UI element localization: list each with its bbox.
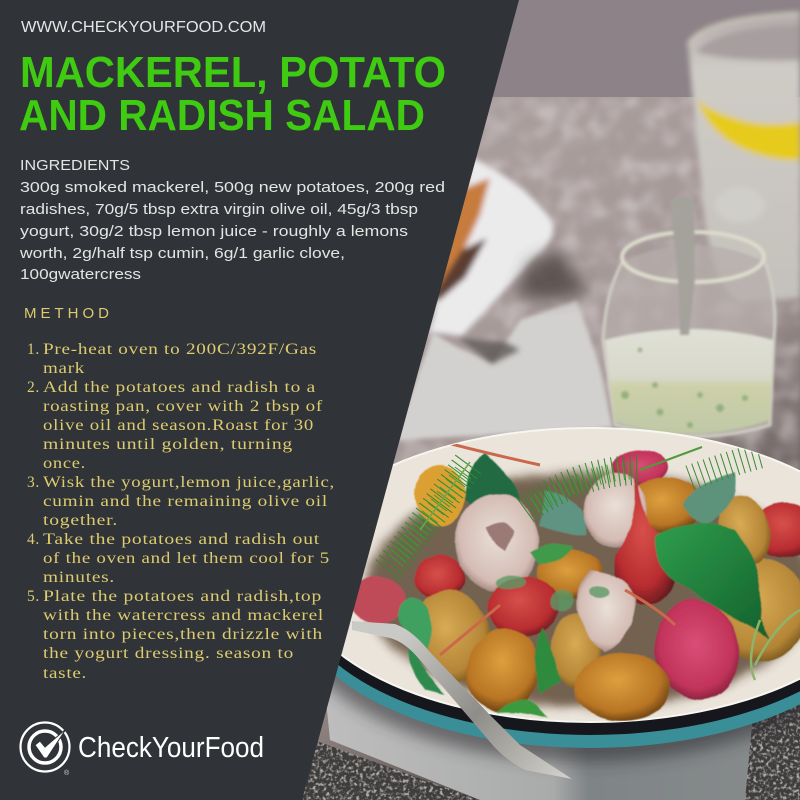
- shadow under salad: [365, 472, 800, 708]
- right-edge radish: [762, 501, 800, 558]
- dark leaf upper left: [465, 453, 521, 510]
- shadow on granite under back plate: [515, 250, 588, 300]
- white towel behind plate: [395, 300, 613, 440]
- step 5: torn into pieces,then drizzle with: [43, 626, 323, 643]
- herb dressing flecks: [496, 575, 610, 610]
- pink radish right: [654, 598, 740, 701]
- lower dark granite: [300, 670, 800, 800]
- step 4: [27, 531, 330, 586]
- top radish: [612, 449, 668, 485]
- small leaf lower: [408, 648, 445, 696]
- black rim: [294, 439, 800, 735]
- dill sprig centre: [525, 447, 702, 510]
- step 3: together.: [43, 512, 118, 529]
- step 4: Take the potatoes and radish out: [43, 531, 320, 548]
- background photo: salad on granite table: [290, 0, 800, 800]
- wall behind table: [420, 0, 800, 100]
- step 1: mark: [43, 360, 85, 377]
- back white plate with food: [425, 158, 553, 336]
- ingredients text block: [19, 157, 445, 283]
- step 3: Wisk the yogurt,lemon juice,garlic,: [43, 474, 335, 491]
- salad: [350, 431, 800, 721]
- dill sprig right: [690, 455, 762, 478]
- step 4: 4.: [27, 531, 40, 548]
- step 4: of the oven and let them cool for 5: [43, 550, 330, 567]
- green leaf by front potato: [536, 628, 560, 695]
- title: [19, 48, 446, 140]
- fish flake top: [583, 473, 647, 547]
- step 1: [27, 341, 317, 377]
- dark text panel: [0, 0, 519, 800]
- step 2: once.: [43, 455, 86, 472]
- title: AND RADISH SALAD: [19, 91, 425, 140]
- right upper potato: [718, 494, 772, 564]
- center potato: [536, 551, 604, 599]
- step 2: [27, 379, 323, 472]
- step 2: 2.: [27, 379, 40, 396]
- far-left radishes: [350, 576, 406, 624]
- method heading: METHOD: [24, 305, 109, 322]
- step 2: minutes until golden, turning: [43, 436, 293, 453]
- top left orange potato: [415, 465, 465, 525]
- step 2: roasting pan, cover with 2 tbsp of: [43, 398, 323, 415]
- method steps: [27, 341, 335, 682]
- back blue-green leaf: [540, 490, 586, 535]
- fish flake centre: [578, 570, 636, 652]
- step 3: 3.: [27, 474, 40, 491]
- registered mark: ®: [64, 769, 70, 777]
- step 1: Pre-heat oven to 200C/392F/Gas: [43, 341, 317, 358]
- icon: check mark in circles: [20, 722, 70, 772]
- tall red radish: [614, 480, 678, 605]
- step 2: Add the potatoes and radish to a: [43, 379, 316, 396]
- glass of lemon water: [688, 13, 800, 302]
- white highlight: [294, 428, 800, 722]
- center red radish: [487, 577, 559, 637]
- dressing jar with spoon: [603, 196, 775, 436]
- ingredients text block: 300g smoked mackerel, 500g new potatoes, 200g red: [20, 179, 445, 196]
- top brown potato: [638, 476, 697, 533]
- radish tails: [439, 444, 676, 656]
- ingredients text block: radishes, 70g/5 tbsp extra virgin olive oil, 45g/3 tbsp: [20, 201, 418, 218]
- shadow on towel under back plate: [458, 338, 520, 364]
- fish flake left: [455, 494, 539, 590]
- step 3: cumin and the remaining olive oil: [43, 493, 328, 510]
- step 5: 5.: [27, 588, 40, 605]
- step 5: Plate the potatoes and radish,top: [43, 588, 322, 605]
- fork: [352, 621, 572, 779]
- website url: WWW.CHECKYOURFOOD.COM: [21, 19, 266, 36]
- step 2: olive oil and season.Roast for 30: [43, 417, 314, 434]
- teal base rim: [294, 452, 800, 748]
- leaf stem right: [751, 610, 800, 680]
- step 5: the yogurt dressing. season to: [43, 645, 294, 662]
- ingredients text block: worth, 2g/half tsp cumin, 6g/1 garlic clove,: [19, 245, 345, 262]
- step 5: [27, 588, 324, 682]
- ingredients text block: yogurt, 30g/2 tbsp lemon juice - roughly a lemons: [20, 223, 408, 240]
- mid potato: [553, 612, 601, 688]
- towel in foreground: [320, 640, 760, 800]
- dill sprig left: [388, 462, 470, 570]
- logo: CheckYourFood: [20, 722, 264, 777]
- cream plate surface: [294, 428, 800, 722]
- small leaf bottom: [497, 699, 548, 718]
- granite counter: [300, 97, 800, 800]
- small leaf center: [530, 545, 572, 565]
- step 5: with the watercress and mackerel: [43, 607, 324, 624]
- step 4: minutes.: [43, 569, 115, 586]
- title: MACKEREL, POTATO: [20, 48, 446, 97]
- right potato gold: [712, 558, 800, 662]
- left potato: [420, 588, 490, 682]
- front-left potato: [466, 628, 538, 713]
- brand name: CheckYourFood: [78, 732, 264, 764]
- step 1: 1.: [27, 341, 40, 358]
- large spinach leaf right: [654, 524, 770, 640]
- ingredients text block: INGREDIENTS: [20, 157, 130, 174]
- step 5: taste.: [43, 665, 87, 682]
- plate shadow: [290, 462, 800, 762]
- main plate: [294, 428, 800, 748]
- ingredients text block: 100gwatercress: [20, 266, 141, 283]
- grey-green leaf right: [683, 472, 736, 525]
- step 3: [27, 474, 335, 529]
- big front potato: [574, 653, 670, 721]
- left bright leaf: [398, 598, 432, 650]
